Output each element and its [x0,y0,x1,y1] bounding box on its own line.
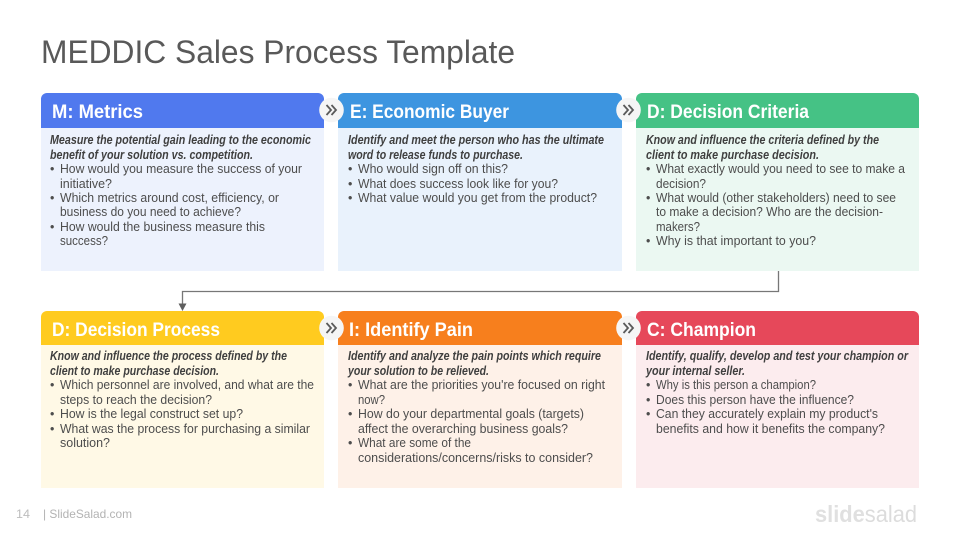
text block: Champion questions [645,349,909,436]
arrow: Metrics to Economic Buyer [319,98,344,122]
arrow: Identify Pain to Champion [616,316,641,340]
header: Economic Buyer [338,93,622,128]
heading: I: Identify Pain: I: Identify Pain [349,319,473,341]
text block: Metrics questions: Which metrics around cost, efficiency, or [60,191,279,205]
text block: Economic Buyer questions: What does success look like for you? [358,177,558,191]
arrow: connector from Decision Criteria to Decision Process [178,271,778,311]
text block: Economic Buyer questions: • [348,177,352,191]
text block: Champion questions: Can they accurately explain my product's [656,407,878,421]
text block: Champion questions: • [646,378,650,392]
text block: Decision Criteria questions: • [646,162,650,176]
text block: Decision Process questions: solution? [60,436,110,450]
text block: Decision Criteria questions [646,133,905,248]
text block: Identify Pain questions: • [348,436,352,450]
header: Decision Criteria [636,93,919,128]
heading: D: Decision Criteria: D: Decision Criteria [647,101,809,123]
text block: Metrics questions: • [50,191,54,205]
text block: Metrics questions: success? [60,234,108,248]
arrow: Economic Buyer to Decision Criteria [616,98,641,122]
panel: E Economic Buyer [338,93,622,271]
heading: E: Economic Buyer: E: Economic Buyer [350,101,509,123]
text block: Identify Pain questions: Identify and analyze the pain points which require [348,349,601,363]
text block: Economic Buyer questions: Who would sign off on this? [358,162,508,176]
panel: D Decision Criteria [636,93,919,271]
text block: Identify Pain questions: now? [358,393,385,407]
text block: Metrics questions: How would the business measure this [60,220,265,234]
text block: Decision Process questions: • [50,407,54,421]
text block: Identify Pain questions: What are some of the [358,436,471,450]
text block: Metrics questions [50,133,311,248]
header: Champion [636,311,919,345]
text block: Identify Pain questions: How do your departmental goals (targets) [358,407,584,421]
text block: Decision Process questions: Which personnel are involved, and what are the [60,378,314,392]
text block: Metrics questions: • [50,162,54,176]
text block: Decision Criteria questions: • [646,191,650,205]
text block: Decision Criteria questions: decision? [656,177,706,191]
text block: Decision Process questions: steps to reach the decision? [60,393,212,407]
text block: Identify Pain questions [347,349,606,465]
text block: Economic Buyer questions [348,133,604,205]
text block: Identify Pain questions: • [348,378,352,392]
text block: Champion questions: Identify, qualify, develop and test your champion or [646,349,909,363]
text block: Champion questions: Why is this person a champion? [656,378,816,392]
text block: Champion questions: • [646,407,650,421]
text block: Decision Process questions: What was the process for purchasing a similar [60,422,310,436]
heading: C: Champion: C: Champion [647,319,756,341]
title: MEDDIC Sales Process Template [41,34,515,70]
text block: Decision Criteria questions: Why is that important to you? [656,234,816,248]
text block: Decision Process questions: • [50,422,54,436]
text block: Identify Pain questions: What are the priorities you're focused on right [358,378,606,392]
text block: Champion questions: your internal seller. [645,364,745,378]
text block: Identify Pain questions: your solution to be relieved. [347,364,489,378]
header: Decision Process [41,311,324,345]
text block: Economic Buyer questions: • [348,162,352,176]
text block: Economic Buyer questions: What value would you get from the product? [358,191,597,205]
text block: Decision Process questions: • [50,378,54,392]
text block: Decision Process questions [50,349,314,450]
footer: website: | SlideSalad.com [43,507,132,521]
text block: Decision Criteria questions: What would (other stakeholders) need to see [656,191,896,205]
text block: Champion questions: Does this person have the influence? [656,393,854,407]
text block: Identify Pain questions: affect the overarching business goals? [358,422,568,436]
text block: Decision Criteria questions: client to make purchase decision. [646,148,819,162]
heading: M: Metrics: M: Metrics [52,101,143,123]
text block: Economic Buyer questions: word to release funds to purchase. [348,148,523,162]
text block: Economic Buyer questions: • [348,191,352,205]
panel: I Identify Pain [338,311,622,488]
text block: Champion questions: • [646,393,650,407]
text block: Metrics questions: • [50,220,54,234]
text block: Metrics questions: benefit of your solution vs. competition. [50,148,253,162]
panel: C Champion [636,311,919,488]
heading: D: Decision Process: D: Decision Process [52,319,220,341]
text block: Metrics questions: How would you measure the success of your [60,162,302,176]
header: Metrics [41,93,324,128]
text block: Champion questions: benefits and how it benefits the company? [656,422,885,436]
text block: Decision Criteria questions: What exactly would you need to see to make a [656,162,905,176]
header: Identify Pain [338,311,622,345]
text block: Decision Criteria questions: • [646,234,650,248]
panel: D Decision Process [41,311,324,488]
text block: Metrics questions: Measure the potential gain leading to the economic [50,133,311,147]
text block: Identify Pain questions: considerations/concerns/risks to consider? [358,451,593,465]
text block: Decision Process questions: How is the legal construct set up? [60,407,243,421]
text block: Decision Process questions: client to make purchase decision. [50,364,219,378]
text block: Decision Criteria questions: Know and influence the criteria defined by the [646,133,879,147]
text block: Decision Criteria questions: makers? [656,220,700,234]
text block: Decision Criteria questions: to make a decision? Who are the decision- [656,205,883,219]
text block: Identify Pain questions: • [348,407,352,421]
text block: Decision Process questions: Know and influence the process defined by the [50,349,287,363]
arrow: Decision Process to Identify Pain [319,316,344,340]
logo: slidesalad: slidesalad [815,501,917,527]
panel: M Metrics [41,93,324,271]
page number: 14 [16,507,30,521]
text block: Economic Buyer questions: Identify and meet the person who has the ultimate [348,133,604,147]
text block: Metrics questions: business do you need to achieve? [60,205,241,219]
text block: Metrics questions: initiative? [60,177,112,191]
